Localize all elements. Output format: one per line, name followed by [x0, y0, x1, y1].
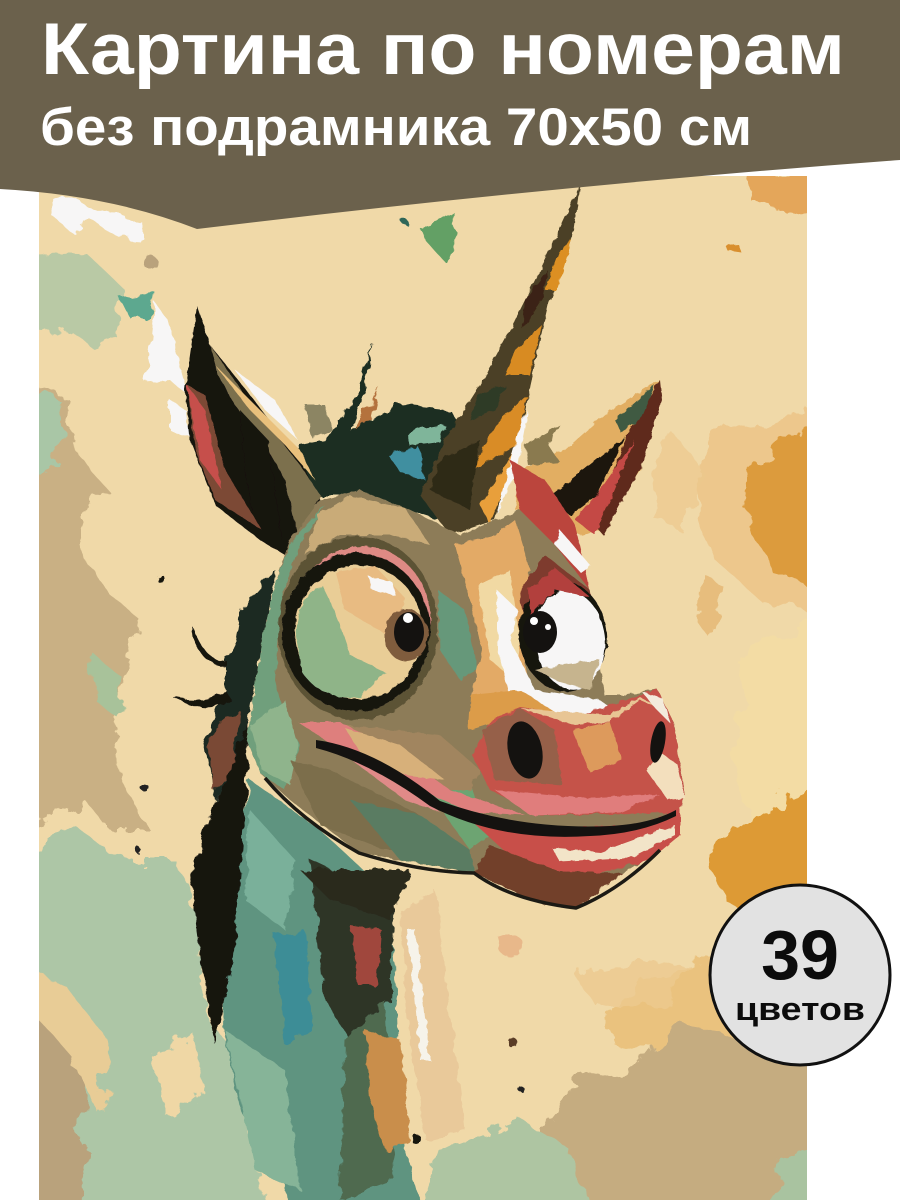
chin outline — [265, 778, 660, 908]
right ear — [510, 380, 662, 590]
painting: unicorn paint-by-numbers canvas — [10, 170, 830, 1200]
right eye pupil — [530, 611, 557, 653]
brow arc — [305, 496, 430, 555]
big left eye — [278, 536, 438, 720]
header banner — [0, 0, 900, 229]
horn — [420, 185, 580, 535]
left ear — [185, 306, 320, 555]
badge label: цветов — [735, 991, 865, 1027]
neck — [222, 780, 465, 1200]
right nostril — [650, 721, 666, 763]
smile line — [316, 740, 676, 837]
head base — [247, 490, 685, 908]
orange right patches — [745, 170, 830, 220]
title: Картина по номерам — [41, 9, 845, 90]
unicorn — [172, 185, 685, 1200]
big eye pupil — [394, 612, 424, 652]
small speckles — [156, 574, 164, 582]
lower cheek tones — [290, 760, 420, 850]
upper lip pink — [298, 722, 525, 815]
painting background — [10, 170, 830, 1200]
head — [247, 490, 685, 908]
mane — [172, 342, 470, 1045]
badge: 39 colours — [710, 885, 890, 1065]
forehead light — [455, 520, 530, 705]
green cheek strip — [247, 505, 325, 790]
green spot — [420, 212, 455, 262]
muzzle — [472, 689, 685, 815]
lower lip — [475, 808, 681, 874]
cheek green near eye — [438, 590, 478, 680]
white patches — [50, 196, 145, 240]
subtitle: без подрамника 70х50 см — [40, 98, 752, 157]
left nostril — [507, 721, 543, 779]
badge number: 39 — [761, 916, 839, 994]
small right eye — [518, 568, 608, 692]
